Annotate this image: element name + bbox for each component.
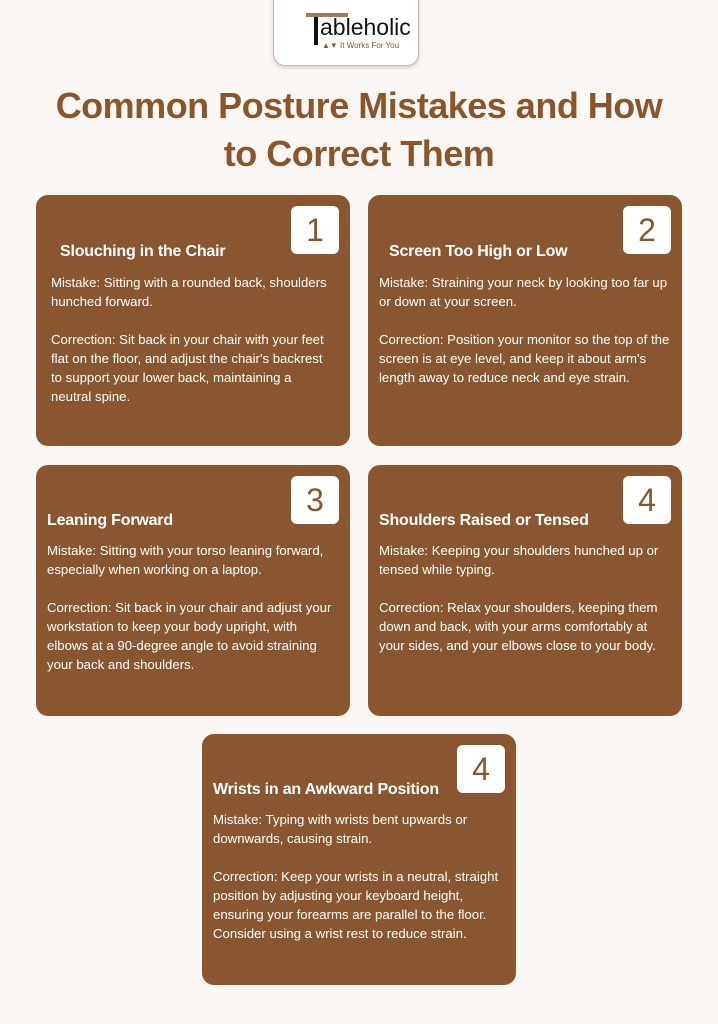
body: Mistake: Keeping your shoulders hunched up or tensed while typing. (379, 543, 658, 577)
title: to Correct Them (224, 133, 494, 174)
body (51, 275, 327, 404)
number 4 (5th) (457, 745, 505, 793)
logo: ▲▼ It Works For You (322, 41, 399, 50)
logo (273, 0, 419, 66)
panel: 5 (202, 734, 516, 985)
panel: 1 (36, 195, 350, 446)
number 1: 1 (306, 212, 324, 248)
body: Correction: Sit back in your chair and adjust your workstation to keep your body upright, with elbows at a 90-degree angle to avoid straining your back and shoulders. (47, 600, 331, 672)
body (379, 275, 669, 385)
heading: Leaning Forward (47, 512, 173, 529)
heading: Screen Too High or Low (389, 243, 567, 260)
body: Correction: Position your monitor so the top of the screen is at eye level, and keep it about arm's length away to reduce neck and eye strain. (379, 332, 669, 385)
panel: 2 (368, 195, 682, 446)
number 4 (623, 476, 671, 524)
body: Mistake: Typing with wrists bent upwards or downwards, causing strain. (213, 812, 467, 846)
body: Correction: Sit back in your chair with your feet flat on the floor, and adjust the chair's backrest to support your lower back, maintaining a neutral spine. (51, 332, 324, 404)
logo: ableholic (320, 14, 411, 40)
body: Correction: Relax your shoulders, keeping them down and back, with your arms comfortably at your sides, and your elbows close to your body. (379, 600, 658, 653)
number 3 (291, 476, 339, 524)
number 2 (623, 206, 671, 254)
body (47, 543, 332, 672)
number 4 (5th): 4 (472, 751, 490, 787)
number 2: 2 (638, 212, 656, 248)
body (213, 812, 498, 941)
body: Mistake: Sitting with your torso leaning forward, especially when working on a laptop. (47, 543, 323, 577)
heading: Wrists in an Awkward Position (213, 781, 439, 798)
body (379, 543, 658, 653)
heading: Slouching in the Chair (60, 243, 225, 260)
number 4: 4 (638, 482, 656, 518)
body: Correction: Keep your wrists in a neutral, straight position by adjusting your keyboard height, ensuring your forearms are parallel to the floor. Consider using a wrist rest to reduce strain. (213, 869, 498, 941)
panel: 3 (36, 465, 350, 716)
body: Mistake: Sitting with a rounded back, shoulders hunched forward. (51, 275, 327, 309)
body: Mistake: Straining your neck by looking too far up or down at your screen. (379, 275, 667, 309)
panel: 4 (368, 465, 682, 716)
title (56, 85, 663, 174)
heading: Shoulders Raised or Tensed (379, 512, 589, 529)
title: Common Posture Mistakes and How (56, 85, 662, 126)
number 1 (291, 206, 339, 254)
number 3: 3 (306, 482, 324, 518)
